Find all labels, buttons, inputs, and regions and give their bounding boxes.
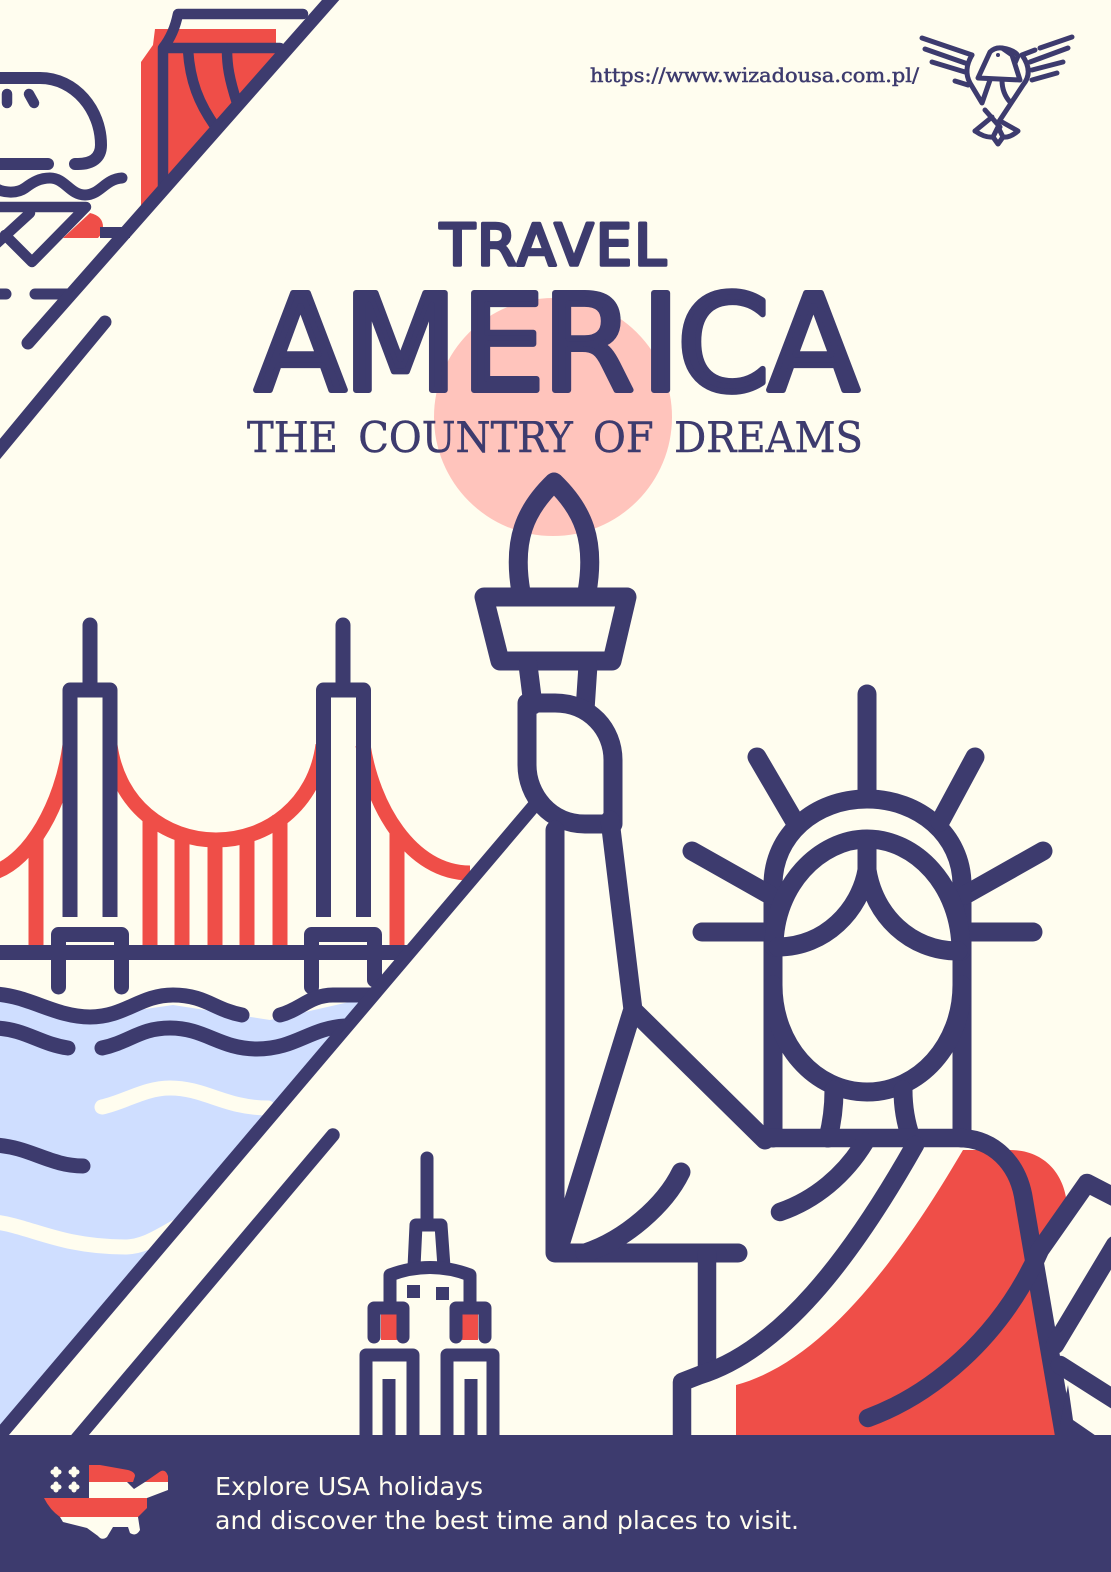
pink sun circle <box>434 298 672 536</box>
can outline <box>163 14 303 190</box>
title: AMERICA: A <box>255 268 346 422</box>
footer text <box>215 1472 799 1535</box>
statue of liberty <box>484 482 1111 1440</box>
footer band <box>0 1435 1111 1572</box>
head and crown <box>692 694 1043 1138</box>
footer text: Explore USA holidays <box>215 1472 483 1501</box>
title: AMERICA: E <box>461 268 545 422</box>
icon: eagle logo <box>922 37 1072 144</box>
title: AMERICA: C <box>677 268 770 422</box>
torch <box>484 482 627 710</box>
red robe <box>736 1150 1067 1440</box>
footer text: and discover the best time and places to visit. <box>215 1506 799 1535</box>
hand and arm <box>527 703 765 1253</box>
title: AMERICA: A <box>768 268 859 422</box>
title: AMERICA: I <box>641 268 680 422</box>
icon: usa flag map <box>44 1465 168 1539</box>
red cables and hangers <box>0 745 470 950</box>
empire state building <box>366 1158 493 1440</box>
main diagonal lines <box>0 807 533 1441</box>
top-left corner: can and burger illustration <box>0 0 335 455</box>
robe lines <box>682 1138 1111 1440</box>
burger <box>0 78 130 294</box>
title: TRAVEL: TRAVEL <box>439 213 666 279</box>
navy waves <box>0 994 372 1166</box>
towers <box>0 625 420 987</box>
cream panel right of main diagonal <box>0 800 1111 1442</box>
subtitle: THE COUNTRY OF DREAMS <box>247 413 863 462</box>
water <box>0 994 380 1446</box>
title: AMERICA: R <box>542 268 634 422</box>
cream wave highlights <box>102 1088 268 1108</box>
title: AMERICA: M <box>343 268 458 422</box>
red can fill <box>141 29 276 216</box>
website url: https://www.wizadousa.com.pl/ <box>590 63 919 87</box>
top diagonal lines <box>0 0 335 455</box>
bridge illustration <box>0 625 470 987</box>
